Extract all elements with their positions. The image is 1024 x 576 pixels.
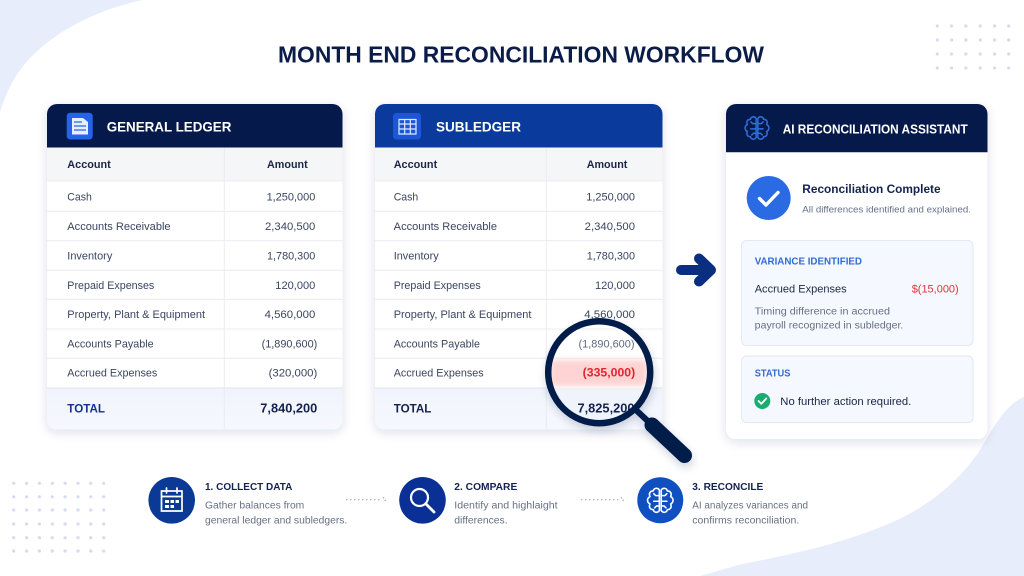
subledger heading: SUBLEDGER xyxy=(436,119,521,135)
subledger table text: 120,000 xyxy=(595,280,635,292)
subledger header xyxy=(375,104,662,148)
step 2: compare xyxy=(399,477,558,526)
icon: magnifying glass xyxy=(399,477,446,524)
arrow: step 1 to 2 xyxy=(346,498,386,502)
subledger table text xyxy=(394,159,635,416)
step 2: compare: differences. xyxy=(454,515,508,526)
general ledger table text: 1,780,300 xyxy=(267,250,315,262)
icon: green check xyxy=(754,393,770,409)
subledger table text: 1,250,000 xyxy=(586,192,635,204)
step 2: compare: 2. COMPARE xyxy=(454,481,517,493)
subledger column header band xyxy=(375,148,662,181)
panel: general ledger xyxy=(47,104,342,430)
general ledger table text: Accounts Receivable xyxy=(67,221,171,233)
step 1: collect data: 1. COLLECT DATA xyxy=(205,481,293,493)
panel: ai reconciliation assistant xyxy=(726,104,988,439)
arrow: step 2 to 3 xyxy=(581,498,624,502)
magnifier handle xyxy=(636,410,684,456)
general ledger table text: 1,250,000 xyxy=(267,192,315,204)
icon: check circle xyxy=(747,176,791,220)
lens contents: (1,890,600) xyxy=(578,338,634,350)
general ledger table text: (320,000) xyxy=(269,368,317,380)
highlight: variance amount xyxy=(550,360,647,386)
dot grid: top right xyxy=(936,24,1010,70)
general ledger column header band xyxy=(47,148,342,181)
step 3: reconcile xyxy=(637,477,808,526)
step 3: reconcile: 3. RECONCILE xyxy=(692,481,763,493)
general ledger table text: Accrued Expenses xyxy=(67,368,158,380)
magnifier over variance xyxy=(546,320,684,456)
lens ring xyxy=(548,321,650,423)
icon: brain xyxy=(745,117,769,139)
assistant header xyxy=(726,104,988,152)
lens contents: 7,825,200 xyxy=(578,402,635,416)
status box xyxy=(742,356,973,422)
general ledger table text: Cash xyxy=(67,192,92,204)
subledger table text: Accounts Payable xyxy=(394,338,480,350)
general ledger table text: 120,000 xyxy=(275,280,315,292)
status box: STATUS xyxy=(755,369,791,380)
background blob: top left xyxy=(0,0,143,112)
subledger table text: Accounts Receivable xyxy=(394,221,497,233)
general ledger table text: TOTAL xyxy=(67,402,105,416)
dot grid: bottom left xyxy=(12,482,105,553)
general ledger table text xyxy=(67,159,317,416)
icon: document xyxy=(67,113,93,140)
variance box: Timing difference in accrued xyxy=(755,306,890,317)
variance box: Accrued Expenses xyxy=(755,283,847,295)
subledger table text: Account xyxy=(394,159,438,171)
lens contents xyxy=(546,320,652,428)
general ledger table text: Accounts Payable xyxy=(67,338,154,350)
general ledger total band xyxy=(47,388,342,430)
subledger table text: Amount xyxy=(587,159,628,171)
background blob: bottom right xyxy=(700,397,1024,576)
step 2: compare: Identify and highlaight xyxy=(454,500,558,511)
variance box: payroll recognized in subledger. xyxy=(755,320,903,331)
general ledger table text: Inventory xyxy=(67,250,113,262)
panel: subledger xyxy=(375,104,662,430)
step 3: reconcile: confirms reconciliation. xyxy=(692,515,799,526)
general ledger table text: Amount xyxy=(267,159,308,171)
subledger table text: TOTAL xyxy=(394,402,431,416)
subledger table text: Cash xyxy=(394,192,418,204)
variance box: VARIANCE IDENTIFIED xyxy=(755,257,862,268)
arrow: to assistant xyxy=(681,258,711,282)
lens contents: (335,000) xyxy=(583,366,635,380)
step 3: reconcile: AI analyzes variances and xyxy=(692,500,808,511)
icon: brain xyxy=(637,477,683,523)
general ledger header xyxy=(47,104,342,148)
subledger table text: 2,340,500 xyxy=(585,221,635,233)
icon: table grid xyxy=(393,113,421,140)
general ledger table text: Property, Plant & Equipment xyxy=(67,309,205,321)
subledger table text: Inventory xyxy=(394,250,439,262)
reconciliation complete text: Reconciliation Complete xyxy=(802,182,941,196)
icon: calendar xyxy=(148,477,195,524)
variance box xyxy=(742,240,973,346)
general ledger table text: 7,840,200 xyxy=(260,402,317,416)
step 1: collect data: Gather balances from xyxy=(205,500,304,511)
status box: No further action required. xyxy=(780,396,911,408)
general ledger table text: 4,560,000 xyxy=(265,309,315,321)
step 1: collect data xyxy=(148,477,347,526)
general ledger table text: Prepaid Expenses xyxy=(67,280,155,292)
general ledger table text: Account xyxy=(67,159,111,171)
reconciliation complete text xyxy=(802,182,971,215)
subledger table text: 1,780,300 xyxy=(587,250,635,262)
general ledger table text: 2,340,500 xyxy=(265,221,315,233)
general ledger table text: (1,890,600) xyxy=(262,338,317,350)
subledger table text: Property, Plant & Equipment xyxy=(394,309,531,321)
subledger table text: Accrued Expenses xyxy=(394,368,484,380)
subledger total band xyxy=(375,388,662,430)
general ledger heading: GENERAL LEDGER xyxy=(107,119,231,135)
assistant heading: AI RECONCILIATION ASSISTANT xyxy=(783,122,968,136)
step 1: collect data: general ledger and subledgers. xyxy=(205,515,347,526)
title: MONTH END RECONCILIATION WORKFLOW xyxy=(278,42,764,68)
variance box: $(15,000) xyxy=(912,283,959,295)
reconciliation complete text: All differences identified and explained. xyxy=(802,204,971,215)
subledger table text: Prepaid Expenses xyxy=(394,280,481,292)
subledger table text: 4,560,000 xyxy=(584,309,635,321)
